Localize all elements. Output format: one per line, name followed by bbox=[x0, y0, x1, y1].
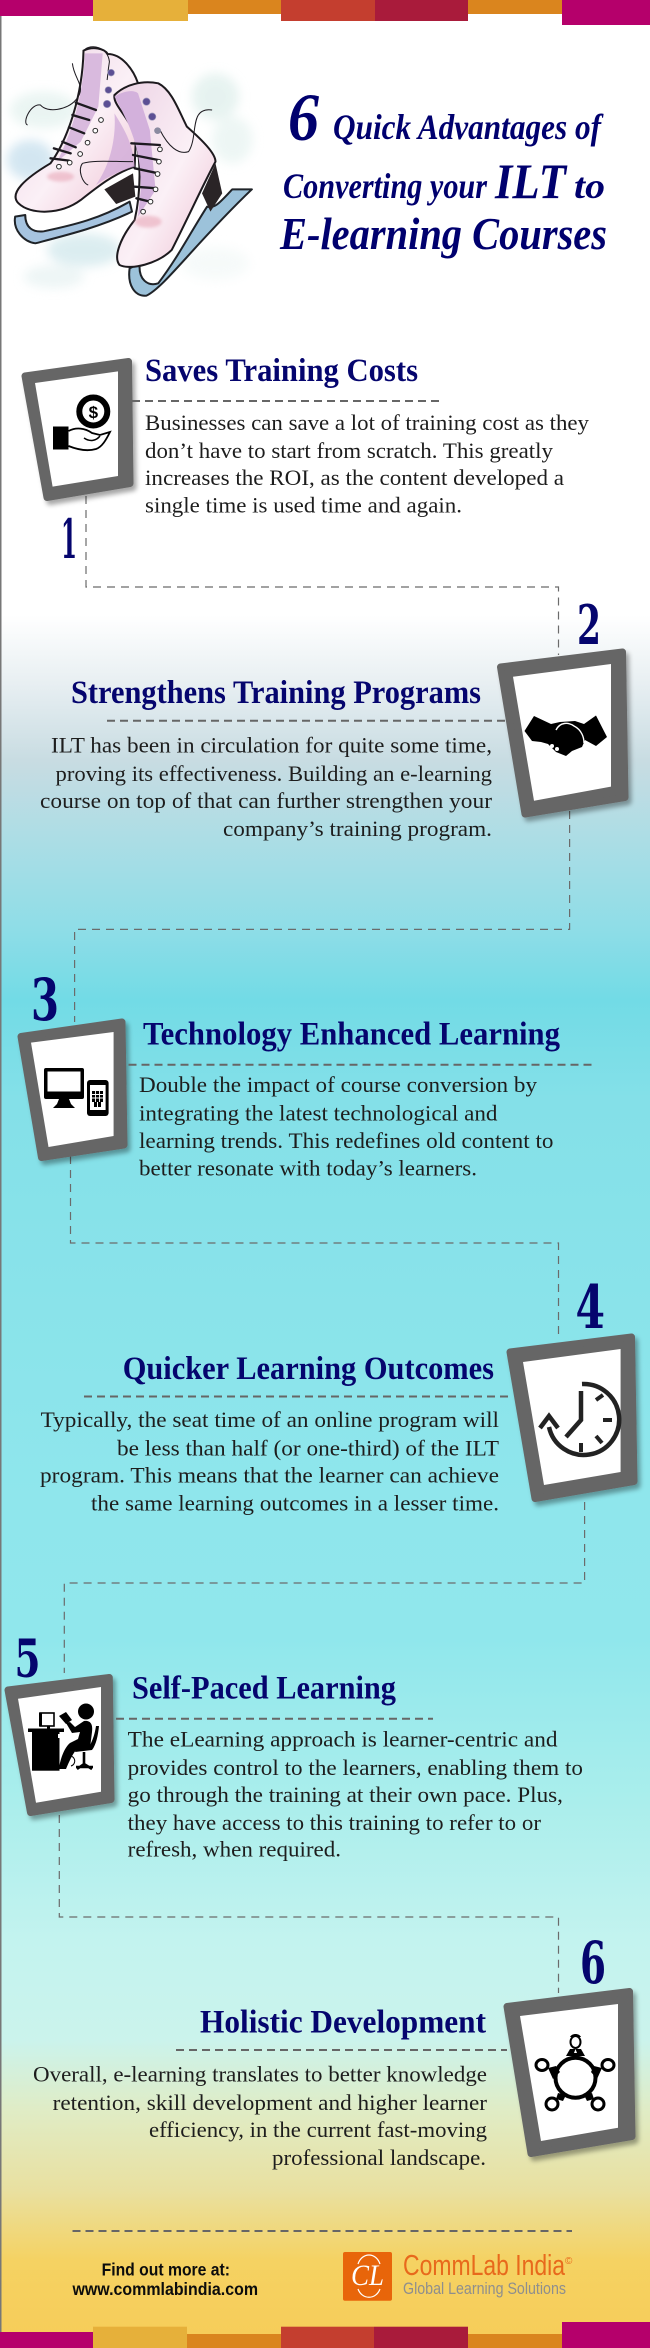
icon tablet 2: handshake bbox=[500, 652, 625, 814]
logo: CommLab India: © bbox=[565, 2256, 573, 2267]
body text: company’s training program. bbox=[223, 816, 492, 841]
right mount bbox=[202, 163, 222, 212]
panel: holistic development bbox=[33, 1929, 632, 2170]
footer: find out more bbox=[72, 2260, 258, 2299]
illustration: ice skates bbox=[7, 47, 253, 296]
left mount bbox=[104, 173, 135, 204]
title: Converting your bbox=[283, 166, 488, 206]
body text bbox=[33, 2062, 488, 2170]
body text: The eLearning approach is learner-centric and bbox=[128, 1727, 558, 1752]
heading: Quicker Learning Outcomes bbox=[123, 1351, 494, 1387]
logo: CommLab India: CommLab India bbox=[403, 2250, 566, 2282]
body text: program. This means that the learner can achieve bbox=[40, 1463, 499, 1488]
body text: professional landscape. bbox=[272, 2145, 486, 2170]
logo: CommLab India bbox=[343, 2250, 573, 2301]
body text: efficiency, in the current fast-moving bbox=[149, 2117, 487, 2142]
right blade bbox=[129, 189, 252, 296]
logo: CommLab India: CL bbox=[351, 2259, 384, 2292]
connector: dashed path 4 to 5 bbox=[64, 1502, 585, 1673]
panel: self-paced learning bbox=[8, 1629, 583, 1862]
title bbox=[279, 79, 607, 259]
heading: Self-Paced Learning bbox=[132, 1671, 396, 1707]
body text: they have access to this training to refer to or bbox=[128, 1810, 542, 1835]
body text: Businesses can save a lot of training cost as they bbox=[145, 410, 590, 435]
panel: saves training costs: 1 bbox=[61, 507, 77, 571]
title: E-learning Courses bbox=[279, 208, 607, 259]
title: ILT bbox=[494, 153, 568, 209]
title: 6 bbox=[288, 79, 319, 155]
body text: proving its effectiveness. Building an e-learning bbox=[56, 761, 492, 786]
number 5: 5 bbox=[14, 1629, 40, 1690]
panel: quicker learning outcomes bbox=[40, 1273, 634, 1516]
body text bbox=[40, 1407, 499, 1516]
body text bbox=[139, 1072, 554, 1180]
seated people bbox=[536, 2034, 614, 2110]
body text bbox=[40, 732, 493, 841]
number 3: 3 bbox=[31, 966, 59, 1034]
icon tablet 6: people around a table bbox=[507, 1992, 632, 2154]
panel: strengthens training programs bbox=[40, 593, 625, 841]
heading: Strengthens Training Programs bbox=[71, 675, 481, 711]
connector: dashed path 2 to 3 bbox=[75, 811, 570, 1022]
right boot bbox=[114, 82, 215, 267]
body text: course on top of that can further strengthen your bbox=[40, 788, 493, 813]
number 2: 2 bbox=[577, 593, 601, 657]
connector: dashed path 1 to 2 bbox=[86, 496, 558, 655]
body text: Typically, the seat time of an online program will bbox=[41, 1407, 499, 1432]
body text: refresh, when required. bbox=[128, 1837, 341, 1862]
title: to bbox=[574, 166, 605, 206]
icon tablet 4: clock with arrow bbox=[510, 1337, 634, 1498]
body text: integrating the latest technological and bbox=[139, 1101, 497, 1126]
number 4: 4 bbox=[576, 1273, 605, 1343]
body text: single time is used time and again. bbox=[145, 493, 462, 518]
eyelets bbox=[57, 118, 162, 214]
body text: don’t have to start from scratch. This greatly bbox=[145, 438, 554, 463]
left boot bbox=[16, 48, 138, 212]
body text: Double the impact of course conversion by bbox=[139, 1072, 538, 1097]
footer: find out more: Find out more at: bbox=[102, 2260, 230, 2280]
top colour bar bbox=[0, 0, 650, 25]
icon tablet 1: coin in hand: $ bbox=[89, 403, 99, 422]
body text: learning trends. This redefines old content to bbox=[139, 1128, 554, 1153]
icon tablet 3: monitor and phone bbox=[21, 1022, 124, 1158]
body text: provides control to the learners, enabling them to bbox=[128, 1755, 583, 1780]
body text: Overall, e-learning translates to better knowledge bbox=[33, 2062, 487, 2087]
number 6: 6 bbox=[580, 1929, 606, 1997]
body text: better resonate with today’s learners. bbox=[139, 1155, 477, 1180]
laces bbox=[51, 103, 160, 202]
body text: the same learning outcomes in a lesser time. bbox=[91, 1491, 499, 1516]
heading: Technology Enhanced Learning bbox=[143, 1016, 560, 1052]
panel: technology enhanced learning bbox=[21, 966, 592, 1180]
body text bbox=[128, 1727, 583, 1862]
connector: dashed path 5 to 6 bbox=[59, 1815, 559, 1993]
heading: Holistic Development bbox=[200, 2005, 486, 2041]
icon tablet 5: person working at desk bbox=[8, 1678, 111, 1812]
body text: retention, skill development and higher learner bbox=[53, 2090, 488, 2115]
body text: be less than half (or one-third) of the ILT bbox=[117, 1436, 499, 1460]
heading: Saves Training Costs bbox=[145, 353, 418, 389]
panel: saves training costs bbox=[25, 353, 590, 571]
left blade bbox=[15, 202, 132, 243]
logo: CommLab India: Global Learning Solutions bbox=[403, 2280, 566, 2298]
icon tablet 1: coin in hand bbox=[25, 362, 130, 498]
footer divider bbox=[72, 2230, 572, 2232]
bottom colour bar bbox=[0, 2322, 650, 2348]
connector: dashed path 3 to 4 bbox=[70, 1156, 558, 1336]
body text: increases the ROI, as the content developed a bbox=[145, 465, 564, 490]
footer: find out more: www.commlabindia.com bbox=[72, 2279, 258, 2299]
title: Quick Advantages of bbox=[333, 107, 604, 147]
body text: go through the training at their own pace. Plus, bbox=[128, 1782, 563, 1807]
body text bbox=[145, 410, 590, 518]
body text: ILT has been in circulation for quite some time, bbox=[51, 732, 492, 758]
